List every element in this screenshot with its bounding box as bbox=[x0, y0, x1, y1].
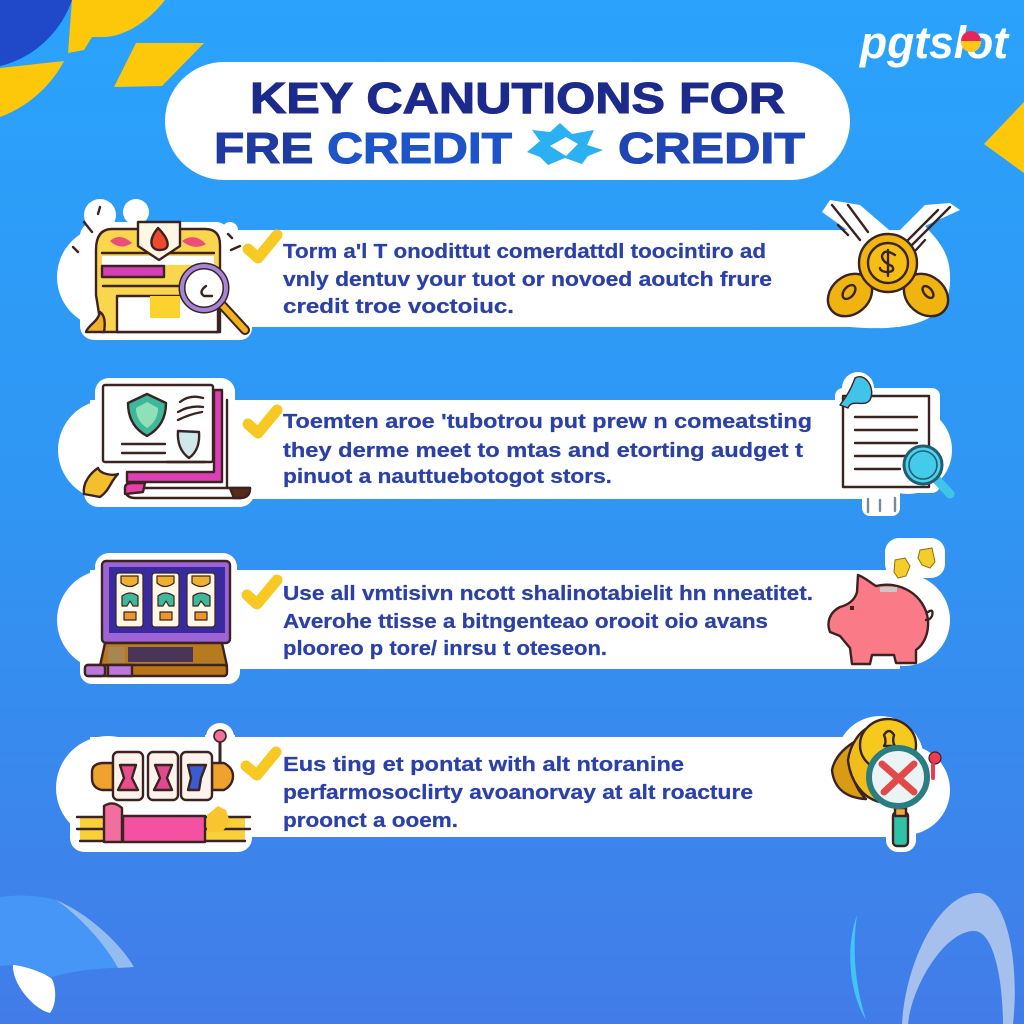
row 4 text: Eus ting et pontat with alt ntoranine bbox=[283, 754, 684, 776]
decoration: top-left shapes bbox=[0, 0, 204, 117]
icon: slot machine bbox=[77, 730, 250, 842]
icon: slot machine monitor bbox=[85, 561, 230, 676]
icon: document with magnifier bbox=[840, 377, 950, 512]
row 2 text bbox=[283, 411, 812, 488]
title line 2: CREDIT bbox=[618, 124, 805, 173]
row 1 panel bbox=[57, 199, 960, 340]
check mark bbox=[247, 580, 277, 604]
row 4 text bbox=[283, 754, 753, 832]
icon: coins under magnifier with cross bbox=[832, 719, 941, 846]
title line 2 bbox=[214, 124, 805, 173]
row 2 text: pinuot a nauttuebotogot stors. bbox=[283, 466, 612, 488]
decoration: right yellow diamond bbox=[984, 102, 1024, 173]
title panel bbox=[165, 62, 850, 180]
icon: gold coins bbox=[819, 205, 957, 325]
icon: treasure chest with magnifier bbox=[73, 207, 245, 332]
check mark bbox=[246, 752, 276, 775]
row 4 text: perfarmosoclirty avoanorvay at alt roacture bbox=[283, 782, 753, 804]
title line 1: KEY CANUTIONS FOR bbox=[250, 74, 785, 123]
icon: document with shields bbox=[84, 385, 250, 498]
row 3 panel bbox=[57, 538, 950, 684]
row 1 background bar bbox=[57, 199, 960, 340]
icon: blue arrows badge bbox=[527, 123, 603, 165]
row 3 text: plooreo p tore/ inrsu t oteseon. bbox=[283, 638, 607, 660]
row 1 text: Torm a'l T onodittut comerdattdl toocintiro ad bbox=[283, 241, 766, 263]
row 2 background bar bbox=[58, 372, 952, 516]
row 3 text: Use all vmtisivn ncott shalinotabielit hn nneatitet. bbox=[283, 583, 813, 605]
row 2 text: they derme meet to mtas and etorting audget t bbox=[283, 440, 803, 462]
icon: piggy bank bbox=[828, 548, 935, 664]
row 4 background bar bbox=[56, 716, 950, 852]
row 1 text: vnly dentuv your tuot or novoed aoutch frure bbox=[283, 269, 772, 291]
decoration: bottom-left shapes bbox=[0, 896, 134, 1013]
row 4 panel bbox=[56, 716, 950, 852]
logo dot bbox=[961, 31, 981, 52]
row 1 text: credit troe voctoiuc. bbox=[283, 296, 514, 318]
title line 2: FRE CREDIT bbox=[214, 124, 512, 173]
row 1 text bbox=[283, 241, 772, 318]
row 3 background bar bbox=[57, 538, 950, 684]
row 2 panel bbox=[58, 372, 952, 516]
decoration: bottom-right arcs bbox=[850, 893, 1015, 1024]
row 3 text bbox=[283, 583, 813, 660]
row 4 text: proonct a ooem. bbox=[283, 810, 458, 832]
icon: falling coins bbox=[894, 548, 935, 578]
check mark bbox=[248, 235, 277, 258]
row 3 text: Averohe ttisse a bitngenteao orooit oio avans bbox=[283, 611, 768, 633]
check mark bbox=[248, 410, 277, 433]
logo: pgtslot bbox=[859, 17, 1010, 68]
row 2 text: Toemten aroe 'tubotrou put prew n comeatsting bbox=[283, 411, 812, 433]
